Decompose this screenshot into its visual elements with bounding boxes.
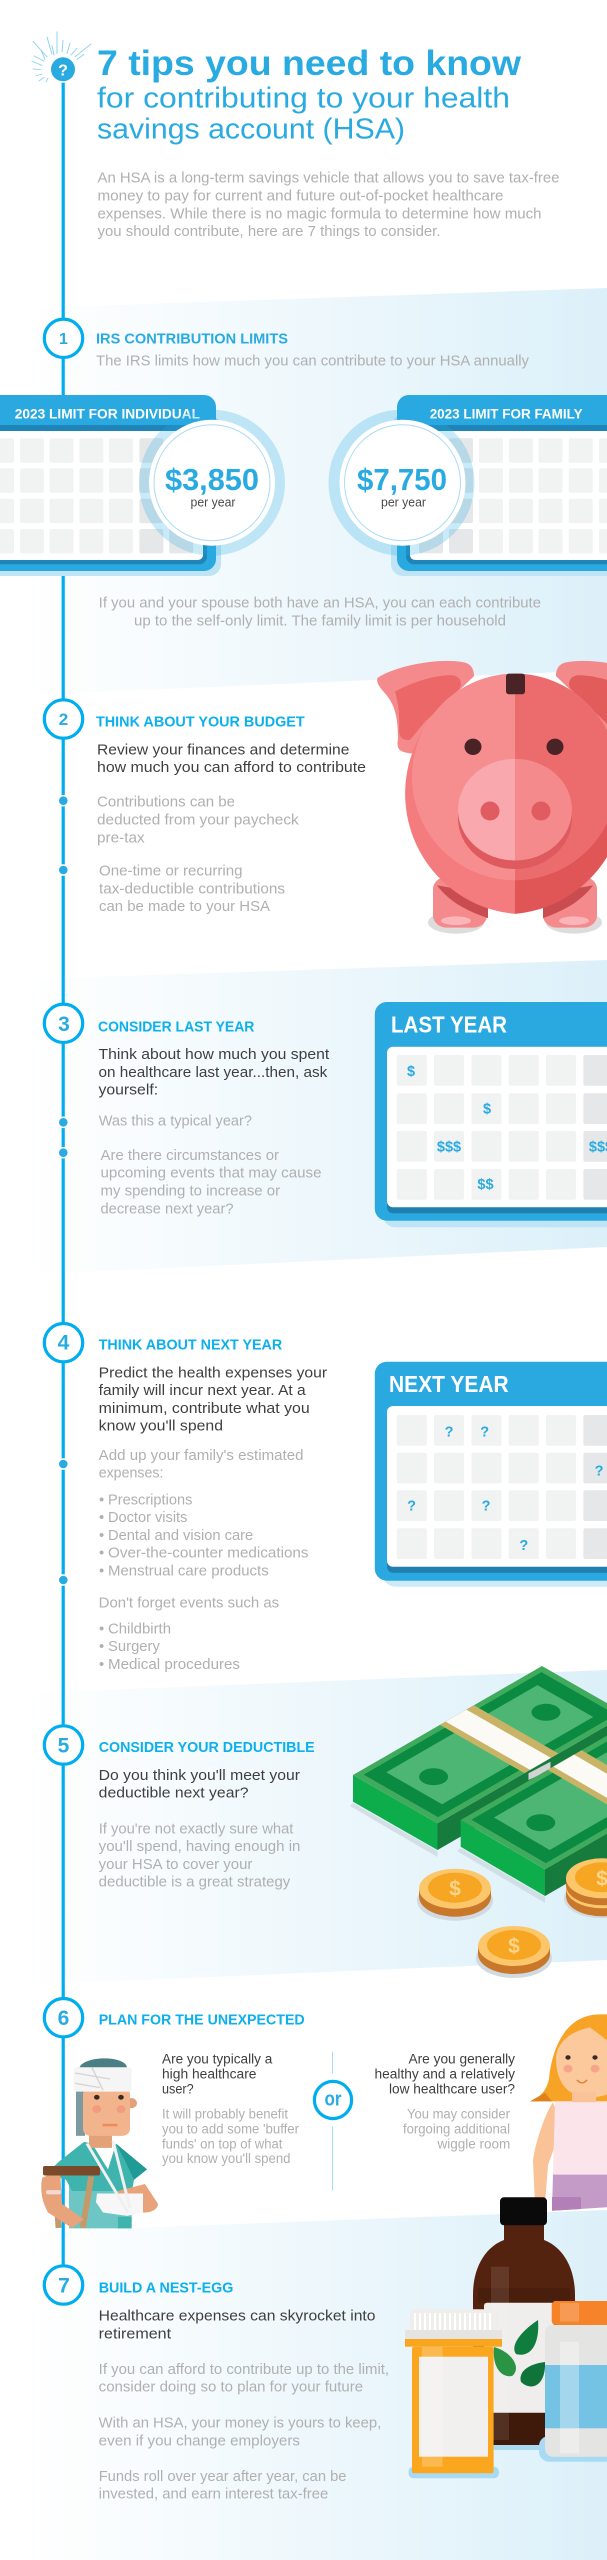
text: step 7 lead: Healthcare expenses can skyrocket into — [99, 2307, 375, 2324]
text: estimated expenses list: • — [99, 1492, 104, 1508]
hair flick — [530, 2093, 552, 2101]
callout: $3,850 per year — [139, 410, 285, 556]
text: events list: • — [99, 1657, 104, 1673]
text: high healthcare user: user? — [162, 2081, 194, 2096]
question markers: ? — [595, 1464, 604, 1480]
intro paragraph: money to pay for current and future out-of-pocket healthcare — [98, 188, 504, 204]
left ear — [377, 661, 474, 754]
intro paragraph: An HSA is a long-term savings vehicle that allows you to save tax-free — [98, 171, 560, 187]
dollar markers: $ — [407, 1064, 415, 1080]
text: household note — [99, 596, 541, 629]
question markers — [407, 1424, 604, 1554]
card header label: 2023 LIMIT FOR INDIVIDUAL — [15, 405, 200, 421]
step 3 marker: 3 — [58, 1013, 70, 1036]
heading: step 4: THINK ABOUT NEXT YEAR — [99, 1338, 283, 1354]
text: upcoming events question: decrease next year? — [100, 1201, 234, 1217]
text: events list: • — [99, 1639, 104, 1655]
text: events list: • — [99, 1621, 104, 1637]
step 1 marker: 1 — [59, 331, 68, 348]
text: payroll deduction — [97, 795, 299, 846]
illustration: medicine bottles — [405, 2197, 607, 2478]
left arm and crutch — [41, 2166, 100, 2228]
hair back — [530, 2014, 607, 2101]
text: high healthcare user — [162, 2051, 299, 2166]
text: payroll deduction: pre-tax — [97, 830, 145, 846]
text: low healthcare user: forgoing additional — [403, 2121, 510, 2136]
text: step 3 lead — [98, 1046, 330, 1098]
title: 7 tips you need to know — [97, 44, 522, 83]
coin slot — [506, 674, 525, 694]
text: estimated expenses list: Dental and vision care — [108, 1528, 253, 1544]
title: for contributing to your health — [97, 82, 510, 114]
text: step 7 lead: retirement — [99, 2325, 172, 2342]
eyes — [464, 739, 564, 755]
text: high healthcare user: Are you typically a — [162, 2051, 273, 2066]
step 4 marker: 4 — [58, 1332, 70, 1355]
neck and head — [74, 2058, 137, 2148]
sling arm — [87, 2141, 158, 2216]
orange pill bottle — [405, 2309, 502, 2478]
text: high healthcare user: you to add some 'buffer — [162, 2121, 299, 2136]
heading: step 5: CONSIDER YOUR DEDUCTIBLE — [99, 1740, 315, 1756]
text: estimated expenses list: Over-the-counter medications — [108, 1546, 308, 1562]
text: high healthcare user: It will probably benefit — [162, 2106, 288, 2121]
text: estimated expenses list: Add up your family's estimated — [99, 1448, 304, 1464]
text: step 3 lead: on healthcare last year...then, ask — [98, 1064, 328, 1081]
text: low healthcare user: low healthcare user? — [389, 2081, 515, 2096]
text: typical year question: Was this a typical year? — [99, 1114, 252, 1130]
step 7 marker: 7 — [58, 2274, 70, 2297]
callout: $7,750 per year: $7,750 — [357, 462, 447, 497]
coin one: $ — [449, 1878, 461, 1901]
text: step 4 lead: know you'll spend — [99, 1418, 223, 1435]
step 2 marker: 2 — [59, 710, 68, 729]
icon: question mark burst — [32, 32, 91, 82]
intro paragraph: expenses. While there is no magic formula to determine how much — [98, 206, 542, 222]
text: events list: Don't forget events such as — [99, 1596, 279, 1612]
text: estimated expenses list: Doctor visits — [108, 1510, 187, 1526]
text: payroll deduction: Contributions can be — [97, 795, 235, 811]
step 5 marker — [44, 1726, 83, 1764]
text: high healthcare user: funds' on top of what — [162, 2136, 283, 2151]
text: step 2 lead: how much you can afford to contribute — [97, 759, 366, 776]
text: low healthcare user — [374, 2051, 515, 2151]
legs — [428, 877, 602, 934]
callout: $7,750 per year — [328, 410, 474, 556]
text: estimated expenses list: Menstrual care products — [108, 1564, 269, 1580]
text: tax-deductible contributions: tax-deductible contributions — [99, 881, 285, 897]
snout — [458, 759, 572, 869]
text: step 7 advice: even if you change employers — [99, 2433, 300, 2449]
heading: step 2: THINK ABOUT YOUR BUDGET — [96, 715, 305, 731]
text: low healthcare user: wiggle room — [436, 2136, 510, 2151]
text: step 7 advice — [99, 2362, 389, 2503]
panel: next year calendar — [375, 1362, 607, 1587]
text: upcoming events question: Are there circumstances or — [100, 1148, 279, 1164]
text: upcoming events question — [100, 1148, 322, 1217]
text: tax-deductible contributions — [99, 864, 285, 915]
step 7 marker — [44, 2266, 83, 2304]
text: estimated expenses list: • — [99, 1510, 104, 1526]
step 2 marker — [44, 700, 83, 738]
text: upcoming events question: upcoming events that may cause — [100, 1166, 322, 1182]
bullet dot — [59, 796, 68, 805]
timeline line — [62, 83, 65, 2265]
text: step 3 lead: yourself: — [98, 1081, 158, 1098]
question markers: ? — [480, 1424, 489, 1440]
title — [97, 44, 522, 145]
question markers: ? — [519, 1538, 528, 1554]
heading: step 6: PLAN FOR THE UNEXPECTED — [99, 2012, 305, 2028]
brown bottle — [473, 2197, 580, 2450]
calendar title: NEXT YEAR — [389, 1371, 509, 1397]
dollar markers: $$ — [477, 1177, 494, 1193]
leaves — [494, 2320, 545, 2386]
panel: 2023 limit for individual — [0, 395, 221, 576]
dollar markers — [407, 1064, 607, 1193]
text: step 5 lead: Do you think you'll meet your — [99, 1767, 300, 1784]
text: estimated expenses list: expenses: — [99, 1466, 163, 1482]
bullet dot — [59, 1460, 68, 1468]
text: step 7 advice: Funds roll over year after year, can be — [99, 2469, 346, 2485]
text: events list: Surgery — [108, 1639, 161, 1655]
bullet dot — [59, 1148, 68, 1157]
text: high healthcare user: you know you'll spend — [162, 2151, 290, 2166]
stack shadows — [350, 1803, 545, 1903]
callout: $7,750 per year: per year — [381, 495, 427, 510]
text: step 7 advice: If you can afford to contribute up to the limit, — [99, 2362, 389, 2378]
divider: or: or — [324, 2088, 342, 2110]
torso and scrubs — [46, 2142, 147, 2228]
icon: piggy bank — [377, 661, 607, 934]
arm — [533, 2102, 562, 2204]
text: upcoming events question: my spending to increase or — [100, 1184, 280, 1200]
intro paragraph — [98, 171, 560, 240]
skirt — [552, 2175, 607, 2211]
step 6 marker: 6 — [58, 2007, 69, 2030]
question markers: ? — [482, 1498, 491, 1514]
intro paragraph: you should contribute, here are 7 things to consider. — [98, 224, 440, 240]
question markers: ? — [445, 1424, 454, 1440]
text: low healthcare user: healthy and a relatively — [374, 2066, 515, 2081]
coin stack — [564, 1858, 607, 1918]
text: step 1 intro: The IRS limits how much you can contribute to your HSA annually — [96, 354, 530, 370]
step 5 marker: 5 — [58, 1734, 70, 1757]
text: events list: Childbirth — [108, 1621, 171, 1637]
right ear — [556, 661, 607, 754]
text: step 2 lead — [97, 741, 366, 776]
dollar markers: $$$ — [437, 1140, 461, 1156]
text: events list — [99, 1596, 279, 1673]
step 6 marker — [44, 1998, 83, 2037]
heading: step 3: CONSIDER LAST YEAR — [98, 1019, 255, 1035]
stack one — [353, 1666, 607, 1850]
top — [553, 2101, 607, 2175]
dollar markers: $ — [483, 1102, 491, 1118]
text: step 5 lead: deductible next year? — [99, 1785, 248, 1802]
text: step 2 lead: Review your finances and determine — [97, 741, 349, 758]
bullet dot — [59, 1118, 68, 1127]
bullet dot — [59, 866, 68, 874]
text: step 7 advice: With an HSA, your money is yours to keep, — [99, 2416, 381, 2432]
stack two — [461, 1711, 607, 1896]
coin two — [476, 1926, 552, 1978]
text: step 5 advice: If you're not exactly sure what — [99, 1821, 293, 1837]
text: step 5 lead — [99, 1767, 300, 1802]
text: high healthcare user: high healthcare — [162, 2066, 256, 2081]
text: step 4 lead: Predict the health expenses your — [99, 1364, 327, 1381]
illustration: healthy woman — [530, 2014, 607, 2211]
text: step 5 advice: your HSA to cover your — [99, 1857, 252, 1873]
callout: $3,850 per year: per year — [190, 495, 236, 510]
text: step 5 advice — [99, 1821, 300, 1891]
body — [405, 674, 607, 914]
text: step 4 lead: minimum, contribute what you — [99, 1400, 310, 1417]
coin two: $ — [508, 1935, 520, 1958]
step 3 marker — [44, 1004, 83, 1042]
text: estimated expenses list: • — [99, 1546, 104, 1562]
text: tax-deductible contributions: can be made to your HSA — [99, 899, 270, 915]
divider: or — [314, 2052, 352, 2191]
text: payroll deduction: deducted from your paycheck — [97, 813, 299, 829]
heading: step 7: BUILD A NEST-EGG — [99, 2281, 233, 2297]
text: low healthcare user: Are you generally — [408, 2051, 515, 2066]
bullet dot — [59, 1576, 68, 1584]
heading: step 1: IRS CONTRIBUTION LIMITS — [96, 331, 288, 347]
text: step 5 advice: you'll spend, having enough in — [99, 1839, 300, 1855]
step 4 marker — [44, 1324, 83, 1362]
icon: question mark burst: ? — [58, 62, 68, 79]
calendar title: LAST YEAR — [391, 1012, 507, 1038]
illustration: money stacks and coins — [350, 1666, 607, 1978]
step 1 marker — [44, 319, 83, 357]
text: estimated expenses list: • — [99, 1564, 104, 1580]
card header label: 2023 LIMIT FOR FAMILY — [430, 405, 583, 421]
text: tax-deductible contributions: One-time or recurring — [99, 864, 243, 880]
coin one — [417, 1869, 493, 1921]
face — [556, 2027, 607, 2102]
text: step 7 lead — [99, 2307, 375, 2342]
text: low healthcare user: You may consider — [407, 2106, 510, 2121]
text: step 7 advice: consider doing so to plan for your future — [99, 2380, 363, 2396]
blue label jar — [539, 2301, 607, 2462]
title: savings account (HSA) — [97, 113, 405, 145]
text: household note: up to the self-only limit. The family limit is per household — [134, 613, 506, 629]
text: estimated expenses list: • — [99, 1528, 104, 1544]
text: estimated expenses list: Prescriptions — [108, 1492, 192, 1508]
callout: $3,850 per year: $3,850 — [165, 462, 259, 497]
text: events list: Medical procedures — [108, 1657, 240, 1673]
text: step 5 advice: deductible is a great strategy — [99, 1875, 291, 1891]
text: step 3 lead: Think about how much you spent — [98, 1046, 330, 1063]
panel: last year calendar — [375, 1002, 607, 1227]
panel: 2023 limit for family — [391, 395, 607, 576]
question markers: ? — [407, 1498, 416, 1514]
illustration: injured man — [41, 2058, 158, 2228]
text: step 7 advice: invested, and earn interest tax-free — [99, 2487, 328, 2503]
text: step 4 lead — [99, 1364, 327, 1435]
text: step 4 lead: family will incur next year. At a — [99, 1382, 306, 1399]
text: household note: If you and your spouse both have an HSA, you can each contribute — [99, 596, 541, 612]
text: estimated expenses list — [99, 1448, 308, 1580]
